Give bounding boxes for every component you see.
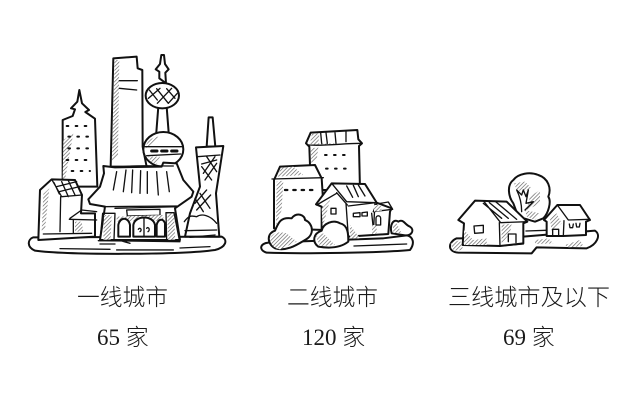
left block bbox=[272, 165, 325, 230]
left high-rise with spire bbox=[63, 90, 97, 187]
small house bbox=[544, 205, 590, 236]
island base bbox=[29, 237, 225, 254]
tall office tower bbox=[111, 57, 147, 167]
base ground strokes bbox=[60, 247, 210, 250]
illustration: third-tier town houses bbox=[450, 173, 598, 253]
label: second-tier cities: 二线城市 bbox=[287, 284, 378, 310]
temple bbox=[88, 163, 193, 244]
bushes bbox=[269, 215, 412, 249]
illustration: second-tier city buildings bbox=[261, 130, 413, 253]
oriental pearl tower bbox=[143, 55, 183, 167]
illustration: first-tier city skyline bbox=[29, 55, 225, 254]
count: first-tier: 65 家 bbox=[97, 325, 149, 350]
canton tower bbox=[184, 117, 223, 237]
label: third-tier cities and below: 三线城市及以下 bbox=[448, 284, 610, 310]
count: second-tier: 120 家 bbox=[302, 325, 365, 350]
count: third-tier: 69 家 bbox=[503, 325, 555, 350]
rear tower bbox=[306, 130, 362, 190]
center house bbox=[316, 183, 393, 238]
large house bbox=[458, 201, 527, 246]
small gabled house bbox=[38, 179, 97, 240]
label: first-tier cities: 一线城市 bbox=[77, 284, 168, 310]
island base bbox=[261, 235, 413, 253]
tree bbox=[509, 173, 550, 222]
island base bbox=[450, 231, 598, 253]
island hatching bbox=[451, 238, 583, 251]
